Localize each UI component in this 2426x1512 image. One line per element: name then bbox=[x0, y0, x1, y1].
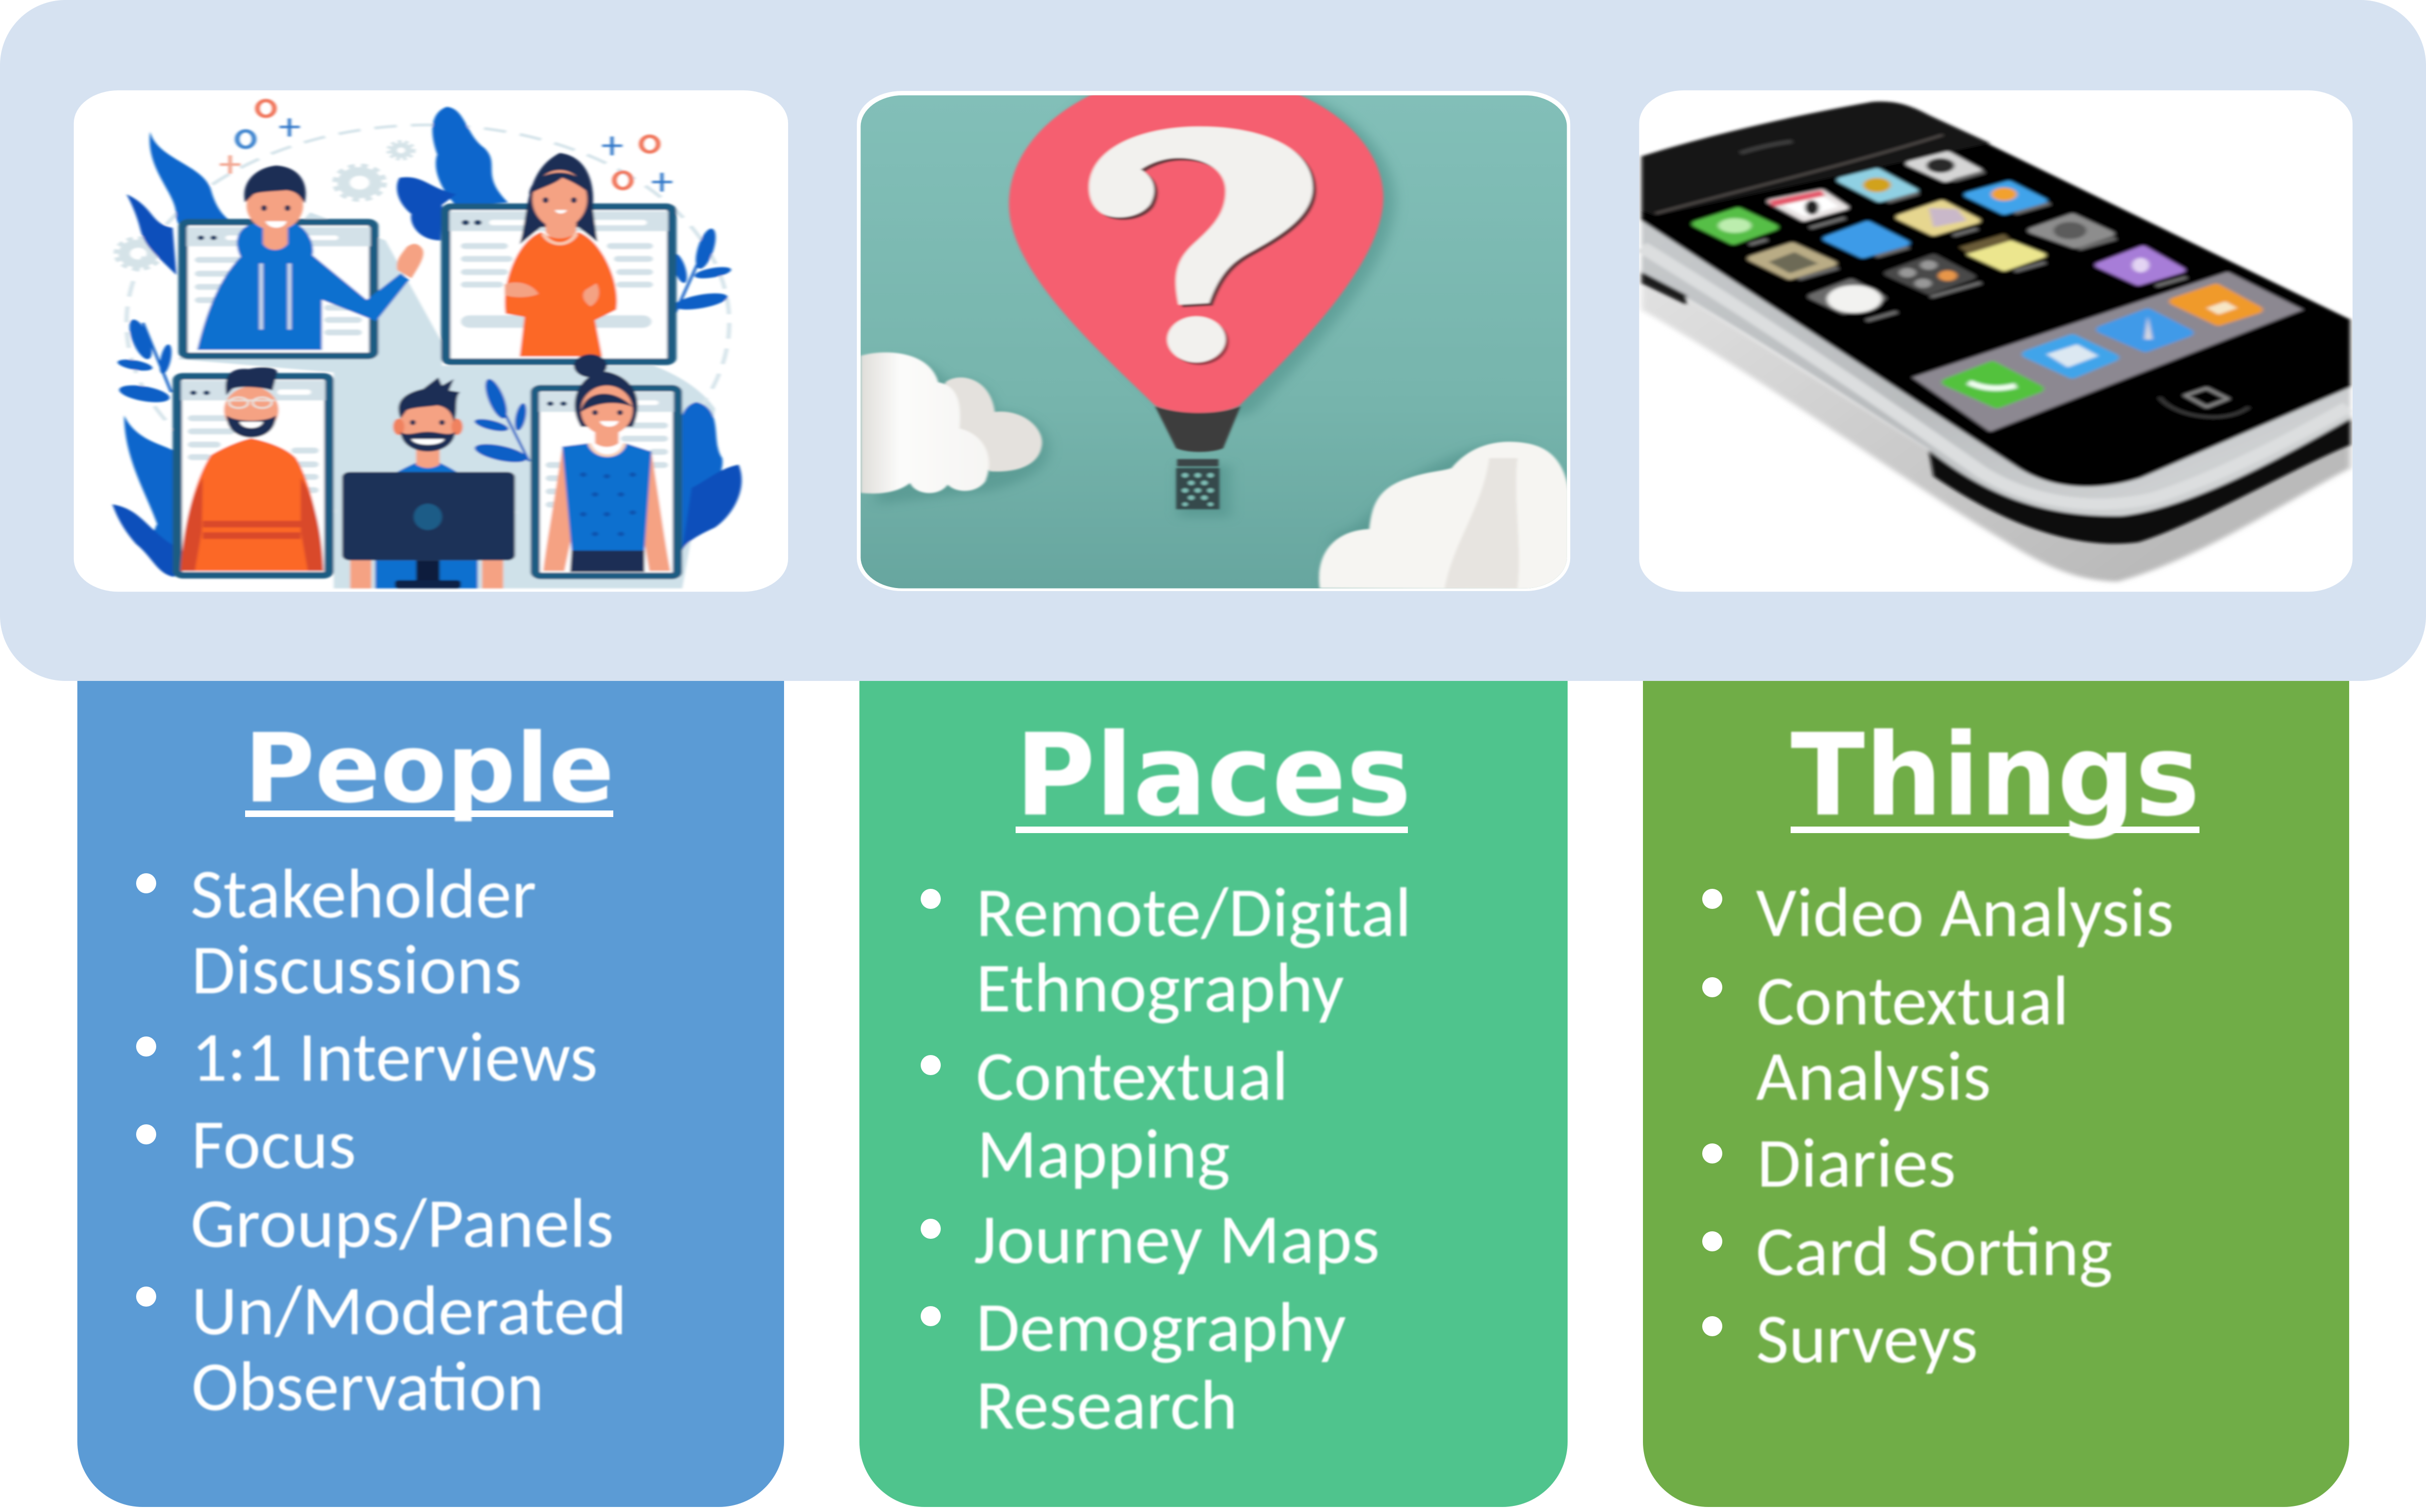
heading: Places: Places bbox=[1015, 710, 1411, 842]
list: places methods: Demography bbox=[976, 1284, 1346, 1370]
list: places methods: Mapping bbox=[977, 1111, 1230, 1197]
list: places methods: Remote/Digital bbox=[976, 869, 1411, 955]
list: places methods: Research bbox=[976, 1362, 1238, 1448]
image: question mark hot air balloon bbox=[857, 91, 1570, 591]
list: places methods: Ethnography bbox=[976, 945, 1344, 1030]
list: things methods: Analysis bbox=[1756, 1033, 1991, 1119]
list: people methods: Discussions bbox=[191, 926, 522, 1012]
list: people methods: Un/Moderated bbox=[191, 1267, 627, 1353]
list: people methods: 1:1 Interviews bbox=[191, 1014, 598, 1100]
heading: People: People bbox=[244, 713, 614, 824]
list: people methods: Stakeholder bbox=[190, 851, 536, 937]
list: people methods: Groups/Panels bbox=[190, 1180, 614, 1266]
image: smartphone bbox=[1639, 90, 2353, 592]
list: people methods bbox=[136, 851, 627, 1429]
list: people methods: Observation bbox=[191, 1343, 544, 1429]
list: things methods: Contextual bbox=[1756, 958, 2069, 1043]
list: people methods: Focus bbox=[191, 1101, 356, 1187]
list: places methods: Contextual bbox=[976, 1033, 1288, 1119]
list: things methods: Surveys bbox=[1756, 1296, 1978, 1381]
list: places methods bbox=[921, 869, 1411, 1448]
list: things methods: Diaries bbox=[1757, 1120, 1956, 1206]
list: things methods bbox=[1702, 869, 2174, 1381]
panel: image band bbox=[0, 0, 2426, 681]
panel: things bbox=[1643, 673, 2349, 1507]
panel: places bbox=[859, 673, 1568, 1507]
image: people on video call bbox=[74, 90, 788, 592]
list: things methods: Card Sorting bbox=[1756, 1208, 2113, 1294]
list: places methods: Journey Maps bbox=[974, 1196, 1380, 1282]
list: things methods: Video Analysis bbox=[1756, 869, 2174, 955]
panel: people bbox=[77, 673, 784, 1507]
heading: Things: Things bbox=[1791, 710, 2200, 842]
